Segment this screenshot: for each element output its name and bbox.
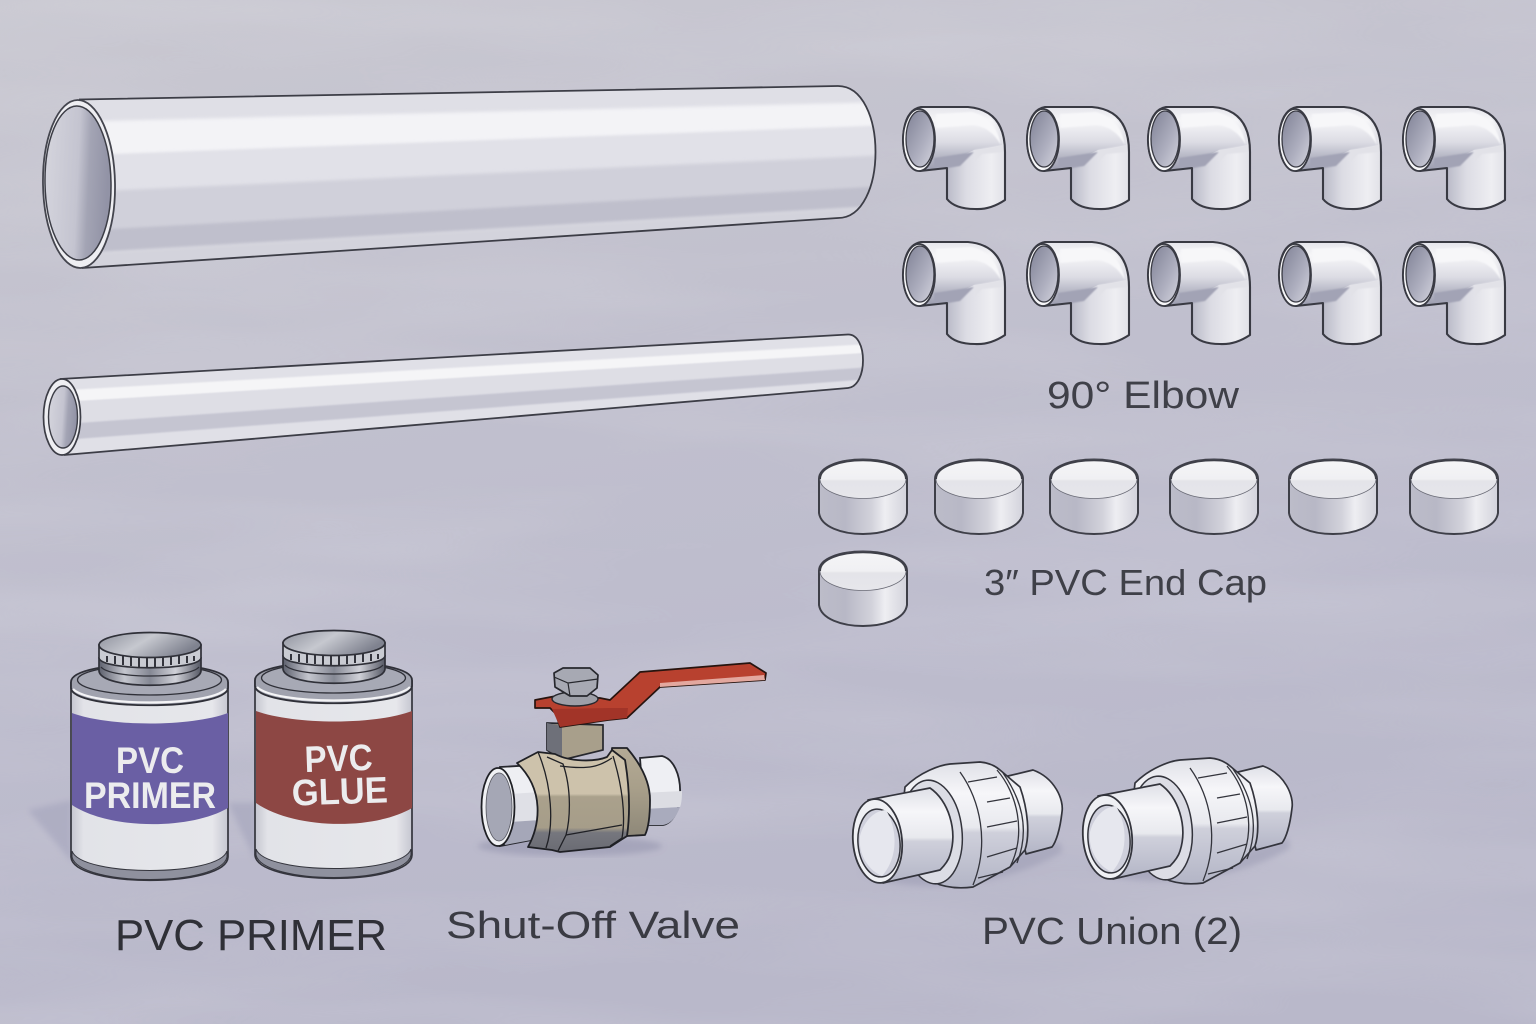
elbow 3 bbox=[1148, 107, 1250, 209]
shut-off valve bbox=[478, 663, 766, 856]
valve shadow bbox=[478, 836, 662, 856]
elbow 2 bbox=[1027, 107, 1129, 209]
cap 7 bbox=[819, 552, 907, 626]
pipe opening bbox=[42, 99, 116, 269]
valve nut bbox=[552, 668, 598, 706]
elbow 10 bbox=[1403, 242, 1505, 344]
elbow fittings group bbox=[903, 107, 1505, 344]
cap 4 bbox=[1170, 460, 1258, 534]
can: PVC glue bbox=[255, 630, 412, 878]
primer label band bbox=[72, 713, 228, 824]
elbow 6 bbox=[903, 242, 1005, 344]
glue can text: PVC bbox=[304, 737, 373, 780]
valve neck bbox=[547, 723, 603, 760]
cap 3 bbox=[1050, 460, 1138, 534]
label: end cap: 3″ PVC End Cap bbox=[984, 562, 1267, 603]
brass body bbox=[517, 750, 629, 852]
can: PVC primer bbox=[71, 632, 228, 880]
pipe opening bbox=[44, 379, 80, 455]
elbow 5 bbox=[1403, 107, 1505, 209]
elbow 1 bbox=[903, 107, 1005, 209]
union shadows bbox=[860, 838, 1290, 886]
glue label band bbox=[256, 711, 412, 824]
label: PVC primer: PVC PRIMER bbox=[115, 911, 387, 960]
pipe body bbox=[60, 334, 863, 455]
red lever handle bbox=[535, 663, 766, 727]
cap 1 bbox=[819, 460, 907, 534]
primer can text: PVC bbox=[116, 740, 184, 781]
label: 90 degree elbow: 90° Elbow bbox=[1047, 375, 1240, 417]
cap 2 bbox=[935, 460, 1023, 534]
label: PVC union: PVC Union (2) bbox=[982, 911, 1242, 953]
label: shut-off valve: Shut-Off Valve bbox=[446, 905, 740, 947]
small PVC pipe bbox=[44, 334, 870, 455]
brass end section bbox=[610, 748, 650, 846]
elbow 4 bbox=[1279, 107, 1381, 209]
elbow 8 bbox=[1148, 242, 1250, 344]
pipe body bbox=[79, 86, 876, 268]
pipe opening bbox=[482, 768, 514, 846]
cap 5 bbox=[1289, 460, 1377, 534]
elbow 9 bbox=[1279, 242, 1381, 344]
glue can text bbox=[290, 736, 388, 814]
primer can text bbox=[84, 740, 216, 816]
can shadows bbox=[28, 800, 256, 862]
left pipe stub bbox=[500, 765, 542, 846]
PVC union 1 bbox=[849, 762, 1062, 888]
primer can text: PRIMER bbox=[84, 775, 216, 816]
glue can text: GLUE bbox=[291, 769, 388, 814]
large PVC pipe bbox=[42, 86, 890, 280]
right pipe stub bbox=[640, 756, 680, 825]
elbow 7 bbox=[1027, 242, 1129, 344]
end caps group bbox=[819, 460, 1498, 626]
cap 6 bbox=[1410, 460, 1498, 534]
PVC union 2 bbox=[1079, 758, 1292, 884]
